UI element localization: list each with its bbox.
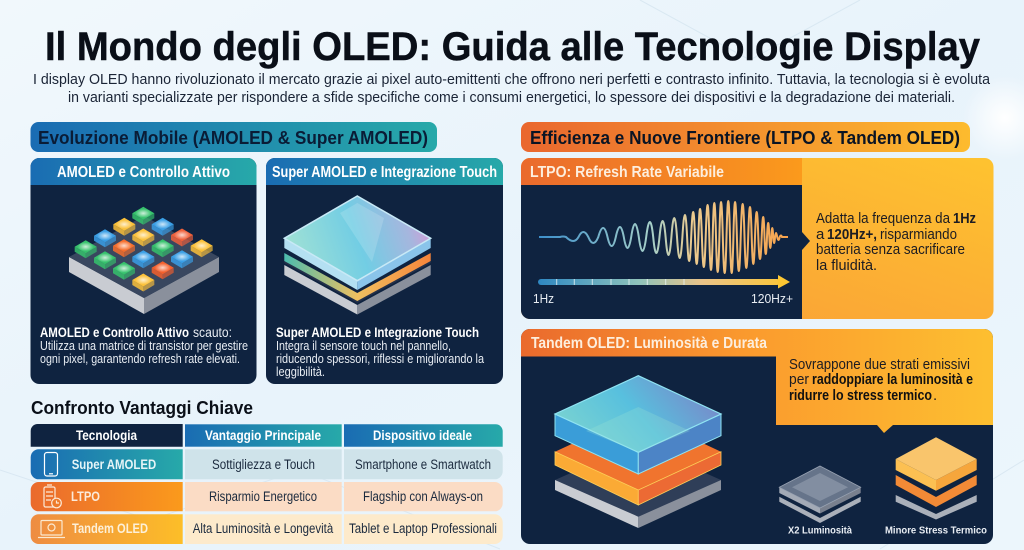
icon: pixel matrix [69,207,219,314]
icon: lower thermal stress stack: Minore Stress Termico [885,524,987,536]
arrow: frequency scale: 1Hz [533,291,554,306]
icon: lower thermal stress stack [885,437,987,536]
section heading: Efficienza e Nuove Frontiere [521,122,970,152]
panel header: LTPO [521,158,802,185]
intro paragraph: I display OLED hanno rivoluzionato il mercato grazie ai pixel auto-emittenti che offrono neri perfetti e contrasto infinito. Tuttavia, la tecnologia si è evoluta [33,71,991,88]
pointer notch [802,232,810,250]
table row: Super AMOLED: Super AMOLED [72,456,156,472]
panel header: LTPO: LTPO: Refresh Rate Variabile [530,164,724,181]
table row: Super AMOLED: Sottigliezza e Touch [212,457,315,472]
table header: Vantaggio Principale [205,427,321,443]
text: LTPO description: la fluidità. [816,257,877,274]
text: AMOLED description: ogni pixel, garantendo refresh rate elevati. [40,352,240,366]
panel header and callout: Sovrappone due strati emissivi [789,356,970,373]
table header [31,424,503,447]
text: AMOLED description: AMOLED e Controllo Attivo [40,325,189,340]
text: LTPO description: 120Hz+, [827,226,877,243]
table row: Tandem OLED: Alta Luminosità e Longevità [193,521,334,536]
panel header and callout: Tandem OLED: Luminosità e Durata [531,335,767,352]
text: AMOLED description: scauto: [193,325,232,340]
panel header and callout: ridurre lo stress termico [789,387,932,404]
chart: variable refresh waveform [539,201,788,273]
table row: LTPO: LTPO [71,488,100,504]
icon: layered glass panel [284,196,431,314]
intro paragraph [33,71,991,106]
heading: Confronto Vantaggi Chiave: Confronto Vantaggi Chiave [31,397,253,418]
panel header: AMOLED [30,158,256,185]
text: Super AMOLED description: Super AMOLED e Integrazione Touch [276,325,479,340]
panel header: Super AMOLED: Super AMOLED e Integrazione Touch [272,164,497,181]
text: LTPO description: risparmiando [880,226,957,243]
text: Super AMOLED description: leggibilità. [276,365,325,379]
intro paragraph: in varianti specializzate per rispondere a sfide specifiche come i consumi energetici, lo spessore dei dispositivi e la degradazione dei materiali. [68,89,955,106]
icon: smartphone [44,452,58,476]
table row: Super AMOLED [31,449,503,479]
arrow: frequency scale [533,275,793,306]
table row: Tandem OLED: Tandem OLED [72,520,148,536]
table row: LTPO: Flagship con Always-on [363,489,483,504]
text: LTPO description: batteria senza sacrificare [816,241,965,258]
panel header and callout: raddoppiare la luminosità e [812,371,973,388]
icon: laptop [38,520,65,538]
table row: Tandem OLED: Tablet e Laptop Professionali [349,521,497,536]
panel header and callout: per [789,371,809,388]
icon: battery with clock [44,485,61,508]
panel: Super AMOLED [266,158,503,384]
text: LTPO description: Adatta la frequenza da [816,210,951,227]
text: LTPO description [816,210,976,274]
panel: AMOLED [30,158,256,384]
icon: large tandem stack [555,376,721,528]
panel header and callout: . [933,387,937,404]
table row: Super AMOLED: Smartphone e Smartwatch [355,457,491,472]
table header: Dispositivo ideale [373,427,472,443]
comparison table [31,424,503,544]
title: Il Mondo degli OLED: Guida alle Tecnologie Display [45,25,981,69]
text: Super AMOLED description [276,325,484,379]
text: LTPO description: a [816,226,825,243]
text: Super AMOLED description: riducendo spessori, riflessi e migliorando la [276,352,484,366]
panel header: Super AMOLED [266,158,503,185]
table header: Tecnologia [76,427,137,443]
section heading: Efficienza e Nuove Frontiere: Efficienza e Nuove Frontiere (LTPO & Tandem OLED) [530,127,960,148]
table row: Tandem OLED [31,514,503,544]
panel header and callout [521,329,993,433]
icon: X2 luminosity stack: X2 Luminosità [788,524,852,536]
table row: LTPO [31,482,503,511]
panel header: AMOLED: AMOLED e Controllo Attivo [57,164,230,181]
panel: LTPO [521,158,994,319]
section heading: Evoluzione Mobile: Evoluzione Mobile (AMOLED & Super AMOLED) [38,127,428,148]
icon: X2 luminosity stack [779,466,861,536]
panel: Tandem OLED [521,329,993,544]
section heading: Evoluzione Mobile [30,122,437,152]
text: AMOLED description: Utilizza una matrice di transistor per gestire [40,339,248,353]
text: LTPO description: 1Hz [953,210,976,227]
text: AMOLED description [40,325,248,366]
text: Super AMOLED description: Integra il sensore touch nel pannello, [276,339,451,353]
table row: LTPO: Risparmio Energetico [209,489,317,504]
arrow: frequency scale: 120Hz+ [751,291,793,306]
